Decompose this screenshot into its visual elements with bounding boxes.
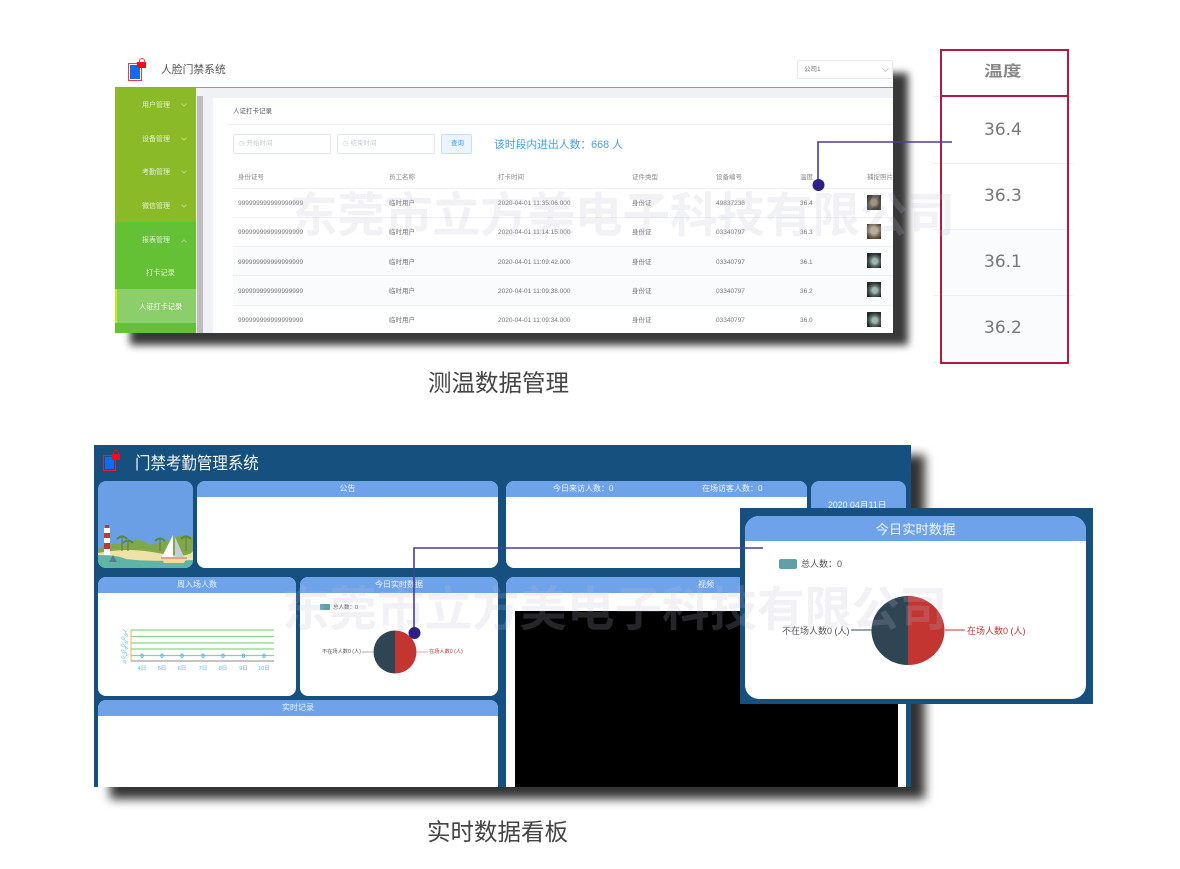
table row 5: 03340797 xyxy=(716,317,745,324)
zoomed pie chart xyxy=(779,558,1026,665)
table header: 员工名称 xyxy=(389,174,415,181)
table row 2: 999999999999999999 xyxy=(238,229,303,236)
panel heading xyxy=(197,481,498,497)
icon: door lock logo xyxy=(103,450,120,471)
count of people in period: 该时段内进出人数：668 人 xyxy=(494,139,623,151)
panel heading xyxy=(300,577,498,593)
content background xyxy=(203,88,893,333)
value 36.2: 36.2 xyxy=(984,318,1022,338)
menu item: users: 用户管理 xyxy=(142,102,170,109)
line chart: 4日 xyxy=(138,665,146,672)
line chart: 0 xyxy=(262,653,266,660)
table row 1: 身份证 xyxy=(632,200,652,207)
table row 5: 36.0 xyxy=(800,317,813,324)
menu item: devices: 设备管理 xyxy=(142,136,170,143)
icon: door lock logo xyxy=(128,58,146,81)
menu item: wechat xyxy=(142,202,187,210)
caption: temperature data management: 测温数据管理 xyxy=(428,370,569,396)
table header: 打卡时间 xyxy=(498,174,524,181)
start time input xyxy=(233,134,331,154)
line chart: 10日 xyxy=(258,665,270,672)
panel heading: 视频 xyxy=(698,580,714,589)
zoomed temperature column xyxy=(933,49,1073,364)
sidebar menu xyxy=(115,88,196,333)
table row 1: 999999999999999999 xyxy=(238,200,303,207)
table header: 证件类型 xyxy=(632,174,658,181)
table row 3: 临时用户 xyxy=(389,259,415,266)
line chart: 0.6 xyxy=(120,639,130,649)
menu item: devices xyxy=(142,135,187,143)
zoomed pie chart: 在场人数0 (人) xyxy=(967,625,1026,636)
zoomed panel: today's real-time data xyxy=(740,508,1093,704)
zoomed heading: 今日实时数据 xyxy=(876,522,955,537)
table row 2: 临时用户 xyxy=(389,229,415,236)
panel heading xyxy=(506,481,807,497)
zoomed pie chart: 总人数：0 xyxy=(801,558,842,569)
panel: weekly entries xyxy=(98,577,296,696)
caption: real-time dashboard: 实时数据看板 xyxy=(427,819,568,845)
panel heading: 今日实时数据 xyxy=(375,580,423,589)
line chart: 0 xyxy=(122,659,128,665)
menu item: selected ID punch records xyxy=(115,289,196,323)
screenshot: attendance temperature records xyxy=(115,55,893,333)
company selector: 公司1 xyxy=(804,66,821,73)
table row 3: 999999999999999999 xyxy=(238,259,303,266)
pie chart xyxy=(320,603,463,674)
line chart: 0.4 xyxy=(120,645,130,655)
panel heading: 今日来访人数：0 xyxy=(553,484,613,493)
value 36.1: 36.1 xyxy=(984,252,1022,272)
table row 2: 2020-04-01 11:14:15.000 xyxy=(498,229,571,236)
panel: today's data xyxy=(300,577,498,696)
panel: video xyxy=(506,577,906,802)
menu item: reports xyxy=(142,236,187,244)
table header: 身份证号 xyxy=(238,174,264,181)
red highlight frame xyxy=(940,49,1069,364)
table row 3 xyxy=(233,247,893,276)
table row 4: 2020-04-01 11:09:38.000 xyxy=(498,288,571,295)
panel heading xyxy=(98,700,498,716)
panel heading: 公告 xyxy=(340,484,356,493)
scrollbar xyxy=(196,88,203,333)
table row 4: 03340797 xyxy=(716,288,745,295)
line chart: 0 xyxy=(201,653,205,660)
line chart xyxy=(120,628,274,672)
table row 5: 身份证 xyxy=(632,317,652,324)
table row 4: 36.2 xyxy=(800,288,813,295)
menu item: punch records: 打卡记录 xyxy=(146,268,175,277)
table row 1: 2020-04-01 11:35:06.000 xyxy=(498,200,571,207)
table row 3: 2020-04-01 11:09:42.000 xyxy=(498,259,571,266)
line chart: 0 xyxy=(221,653,225,660)
menu item: users xyxy=(142,101,187,109)
zoomed card xyxy=(745,516,1086,699)
search button xyxy=(441,134,472,154)
panel heading xyxy=(506,577,906,593)
line chart: 6日 xyxy=(178,665,186,672)
table row 3: 36.1 xyxy=(800,259,813,266)
panel: records card xyxy=(213,98,893,333)
table row 5 xyxy=(238,312,881,327)
zoomed pie chart: 不在场人数0 (人) xyxy=(782,625,850,636)
table row 4: 身份证 xyxy=(632,288,652,295)
panel: illustration xyxy=(98,481,193,568)
screenshot: dashboard xyxy=(94,445,911,787)
table row 4 xyxy=(233,276,893,306)
table header xyxy=(233,160,893,189)
panel: notice xyxy=(197,481,498,568)
line chart: 8日 xyxy=(219,665,227,672)
panel heading: 实时记录 xyxy=(282,703,314,712)
video area xyxy=(515,611,898,802)
column heading: 温度 xyxy=(984,63,1022,80)
pie chart: 不在场人数0 (人) xyxy=(322,647,361,655)
table header: 捕捉照片 xyxy=(867,174,893,181)
table row 2 xyxy=(233,218,893,247)
panel heading xyxy=(98,577,296,593)
search button: 查询 xyxy=(451,140,464,147)
pie chart: 在场人数0 (人) xyxy=(429,647,463,655)
system title: 人脸门禁系统 xyxy=(161,64,226,76)
watermark: bottom: 东莞市立方美电子科技有限公司 xyxy=(282,584,947,637)
table header: 设备编号 xyxy=(716,174,742,181)
line chart: 7日 xyxy=(199,665,207,672)
table row 3: 03340797 xyxy=(716,259,745,266)
line chart: 0 xyxy=(140,653,144,660)
line chart: 0 xyxy=(160,653,164,660)
table row 3: 身份证 xyxy=(632,259,652,266)
menu item: attendance: 考勤管理 xyxy=(142,169,170,176)
panel: date xyxy=(811,481,906,568)
menu item: wechat: 微信管理 xyxy=(142,203,170,210)
table row 1 xyxy=(233,189,893,218)
line chart: 9日 xyxy=(239,665,248,672)
table row 2: 03340797 xyxy=(716,229,745,236)
table row 1: 49837238 xyxy=(716,200,745,207)
dashboard title: 门禁考勤管理系统 xyxy=(135,454,259,473)
table row 5: 2020-04-01 11:09:34.000 xyxy=(498,317,571,324)
table row 2: 身份证 xyxy=(632,229,652,236)
company selector xyxy=(797,60,893,79)
table row 2: 36.3 xyxy=(800,229,813,236)
menu item: selected ID punch records: 人证打卡记录 xyxy=(139,302,182,311)
watermark: top: 东莞市立方美电子科技有限公司 xyxy=(290,190,955,243)
value 36.3: 36.3 xyxy=(984,186,1022,206)
menu item: reports: 报表管理 xyxy=(142,237,170,244)
menu item: attendance xyxy=(142,168,187,176)
value 36.4: 36.4 xyxy=(984,120,1022,140)
end time input xyxy=(337,134,435,154)
table row 4: 临时用户 xyxy=(389,288,415,295)
line chart: 0.2 xyxy=(120,651,130,661)
end time input: ◷ 结束时间 xyxy=(343,140,376,147)
panel: live records xyxy=(98,700,498,800)
pie chart: 总人数：0 xyxy=(333,603,358,611)
panel: visitors xyxy=(506,481,807,568)
line chart: 5日 xyxy=(158,665,166,672)
table header: 温度 xyxy=(800,174,813,181)
panel heading: 周入场人数 xyxy=(177,580,217,589)
zoomed heading xyxy=(745,516,1086,541)
table row 1: 临时用户 xyxy=(389,200,415,207)
line chart: 1 xyxy=(122,628,128,634)
table row 4: 999999999999999999 xyxy=(238,288,303,295)
table row 5: 临时用户 xyxy=(389,317,415,324)
line chart: 0 xyxy=(180,653,184,660)
card heading: 人证打卡记录 xyxy=(233,108,272,115)
panel: date: 2020 04月11日 xyxy=(828,500,887,510)
table row 5: 999999999999999999 xyxy=(238,317,303,324)
start time input: ◷ 开始时间 xyxy=(239,140,272,147)
table row 1: 36.4 xyxy=(800,200,813,207)
illustration: beach scene xyxy=(98,525,193,568)
panel heading: 在场访客人数：0 xyxy=(702,484,762,493)
line chart: 0 xyxy=(242,653,246,660)
line chart: 0.8 xyxy=(120,632,130,642)
